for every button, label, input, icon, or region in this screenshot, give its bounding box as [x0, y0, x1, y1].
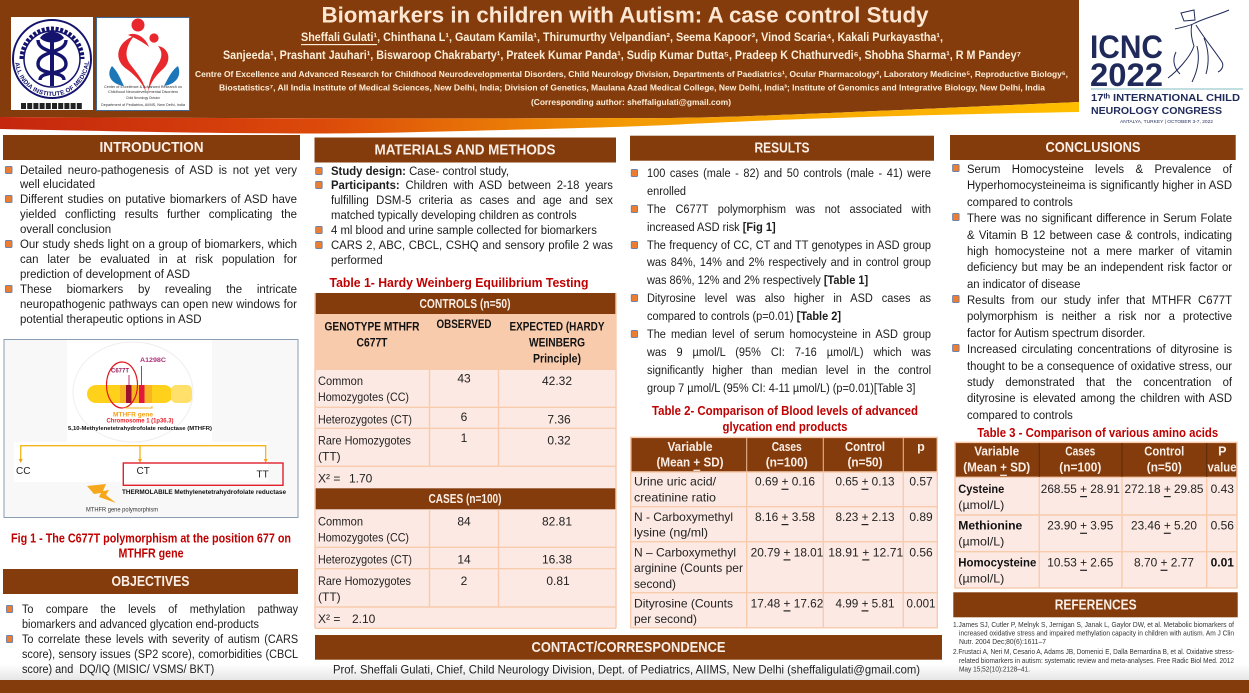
introduction text: These biomarkers by revealing the intricate [20, 282, 297, 296]
controls subtable: Homozygotes (CC) [318, 390, 409, 404]
controls subtable: WEINBERG [529, 336, 585, 350]
heading: introduction [3, 135, 300, 160]
table 3: amino acids: (µmol/L) [958, 498, 1004, 512]
logo: Centre of Excellence: Child Neurology Division [126, 96, 160, 100]
objectives text: To correlate these levels with severity of autism (CARS [22, 632, 298, 646]
poster title: Biomarkers in children with Autism: A case control Study [322, 2, 929, 28]
conclusions text: study demonstrated that the concentration of [967, 375, 1232, 389]
conclusions text: compared to controls [967, 408, 1073, 422]
heading: introduction: INTRODUCTION [100, 139, 204, 156]
conclusions text: compared to controls [967, 195, 1073, 209]
introduction text: neuropathogenic pathways can open new windows for [20, 297, 297, 311]
controls subtable: 0.32 [547, 433, 571, 447]
table 2: blood levels: 18.91 + 12.71 [828, 545, 904, 559]
controls subtable: Principle) [533, 352, 581, 366]
table 3: amino acids: (n=50) [1147, 461, 1182, 475]
controls subtable: Common [318, 374, 363, 388]
heading: results: RESULTS [754, 140, 810, 157]
results text: The frequency of CC, CT and TT genotypes in ASD group [647, 238, 931, 252]
results text: was 84%, 14% and 2% respectively and in control group [647, 255, 931, 269]
table 2: blood levels: N - Carboxymethyl [634, 510, 733, 524]
table 2: blood levels: (n=50) [848, 456, 882, 470]
materials and methods text: matched typically developing children as controls [331, 208, 577, 222]
table 3: amino acids: 23.90 + 3.95 [1047, 519, 1114, 533]
conclusions text: factor for Autism spectrum disorder. [967, 326, 1145, 340]
objectives text: score), sensory issues (SP2 score), comorbidities (CBCL [22, 646, 298, 660]
table 3: amino acids: Methionine [958, 519, 1023, 533]
table 3: amino acids: value [1208, 461, 1237, 475]
table 2: blood levels: Cases [772, 440, 802, 454]
results text: The C677T polymorphism was not associated with [647, 202, 931, 216]
cases subtable: Rare Homozygotes [318, 574, 411, 588]
table 3: amino acids: (n=100) [1059, 461, 1101, 475]
heading: references [953, 592, 1238, 617]
figure 1: MTHFR polymorphism diagram: 5,10-Methylenetetrahydrofolate reductase (MTHFR) [68, 426, 212, 432]
results text: The median level of serum homocysteine in ASD group [647, 327, 931, 341]
heading: contact [315, 635, 942, 660]
results text: significantly higher than median level in the control [647, 363, 931, 377]
controls subtable [318, 297, 604, 485]
figure 1: MTHFR polymorphism diagram: C677T [111, 368, 129, 374]
heading: materials and methods: MATERIALS AND METHODS [374, 142, 556, 158]
logo: Centre of Excellence: Childhood Neurodevelopmental Disorders [108, 90, 178, 94]
cases subtable: X² = [318, 612, 340, 626]
table 3: amino acids: (µmol/L) [958, 535, 1004, 549]
table 3: amino acids: Cases [1065, 445, 1095, 459]
cases subtable: Heterozygotes (CT) [318, 552, 412, 566]
table 2: blood levels: 8.16 + 3.58 [755, 510, 815, 524]
table 3: amino acids: 268.55 + 28.91 [1041, 482, 1120, 496]
results text: compared to controls (p=0.01) [Table 2] [647, 309, 841, 323]
materials and methods text [315, 164, 613, 267]
conclusions text: high homocysteine not a mere marker of vitamin [967, 244, 1232, 258]
logo: ICNC 2022: 2022 [1090, 57, 1163, 93]
cases subtable: (TT) [318, 590, 341, 604]
introduction text [4, 162, 297, 326]
logo: ICNC 2022: ICNC [1090, 29, 1163, 65]
controls subtable: Heterozygotes (CT) [318, 412, 412, 426]
table 3: amino acids: 0.01 [1211, 556, 1234, 570]
controls subtable: 1 [461, 431, 468, 445]
table 2: blood levels: Dityrosine (Counts [634, 596, 733, 610]
cases subtable: 16.38 [542, 552, 572, 566]
conclusions text: There was no significant difference in Serum Folate [967, 211, 1232, 225]
introduction text: Detailed neuro-pathogenesis of ASD is not yet very [20, 162, 297, 176]
table 2: blood levels: creatinine ratio [634, 491, 716, 505]
figure 1: MTHFR polymorphism diagram: CT [136, 466, 150, 477]
introduction text: Different studies on putative biomarkers of ASD have [20, 192, 297, 206]
table 2: blood levels: N – Carboxymethyl [634, 545, 736, 559]
authors: Sanjeeda¹, Prashant Jauhari¹, Biswaroop Chakrabarty¹, Prateek Kumar Panda¹, Sudip Kumar Dutta⁵, Pradeep K Chathurvedi⁶, Shobha Sharma¹, R M Pandey⁷ [223, 50, 1021, 62]
figure 1 caption: MTHFR gene [118, 546, 184, 560]
objectives text: biomarkers and advanced glycation end-products [22, 616, 259, 630]
conclusions text: Increased circulating concentrations of dityrosine is [967, 342, 1232, 356]
table 2: blood levels: (n=100) [766, 456, 808, 470]
table 3: amino acids [954, 442, 1238, 588]
table 3: amino acids: 8.70 + 2.77 [1134, 556, 1194, 570]
objectives text: score) and DQ/IQ (MISIC/ VSMS/ BKT) [22, 662, 214, 676]
objectives text: To compare the levels of methylation pathway [22, 602, 298, 616]
table 2: blood levels: arginine (Counts per [634, 561, 743, 575]
cases subtable: 0.81 [546, 574, 570, 588]
table 3: amino acids: 0.56 [1211, 519, 1234, 533]
table 2: blood levels: Variable [668, 440, 713, 454]
introduction text: Our study sheds light on a group of biomarkers, which [20, 237, 297, 251]
table 3: amino acids: Variable [974, 445, 1019, 459]
contact details: Prof. Sheffali Gulati, Chief, Child Neurology Division, Dept. of Pediatrics, AIIMS, New Delhi (sheffaligulati@gmail.com) [333, 662, 920, 676]
logo: ICNC 2022: ANTALYA, TURKEY | OCTOBER 3-7, 2022 [1120, 119, 1213, 124]
affiliations: Centre Of Excellence and Advanced Research for Childhood Neurodevelopmental Disorders, Child Neurology Division, Departments of Paediatrics¹, Ocular Pharmacology², Laboratory Medicine⁵, Reproductive Biology⁶, [195, 69, 1068, 79]
authors: Sheffali Gulati¹, Chinthana L¹, Gautam Kamila¹, Thirumurthy Velpandian², Seema Kapoor³, Vinod Scaria⁴, Kakali Purkayastha¹, [301, 32, 943, 44]
conclusions text: thought to be a consequence of oxidative stress, our [967, 358, 1232, 372]
controls subtable: C677T [356, 336, 388, 350]
table 2: blood levels: Control [845, 440, 885, 454]
table 3: amino acids: 0.43 [1211, 482, 1234, 496]
table 2: blood levels: 8.23 + 2.13 [836, 510, 895, 524]
table 2: blood levels: per second) [634, 612, 697, 626]
controls subtable: 6 [461, 410, 468, 424]
affiliations: Biostatistics⁷, All India Institute of Medical Sciences, New Delhi, India; Division of Genetics, Maulana Azad Medical College, New Delhi, India³; Institute of Genomics and Integrative Biology, New Delhi, India [219, 82, 1045, 92]
heading: conclusions: CONCLUSIONS [1046, 139, 1140, 156]
controls subtable: Rare Homozygotes [318, 433, 411, 447]
table 3: amino acids: Control [1144, 445, 1184, 459]
table 2 title: Table 2- Comparison of Blood levels of advanced [652, 403, 918, 418]
figure 1 caption [11, 530, 291, 560]
table 3: amino acids: 272.18 + 29.85 [1124, 482, 1204, 496]
cases subtable: 2 [461, 574, 468, 588]
table 3: amino acids: P [1218, 445, 1226, 459]
logo: Centre of Excellence [96, 18, 190, 110]
table 3: amino acids: 10.53 + 2.65 [1047, 556, 1114, 570]
logo: ICNC 2022 [1090, 10, 1243, 124]
introduction text: prediction of development of ASD [20, 267, 190, 281]
introduction text: potential therapeutic options in ASD [20, 312, 202, 326]
heading: objectives: OBJECTIVES [112, 573, 190, 590]
heading: materials and methods [314, 138, 616, 162]
table 2: blood levels: 0.65 + 0.13 [836, 475, 895, 489]
introduction text: overall conclusion [20, 222, 111, 236]
controls subtable: OBSERVED [436, 317, 492, 331]
results text: was 9 µmol/L (95% CI: 7-16 µmol/L) which was [647, 345, 931, 359]
results text: was 86%, 12% and 2% respectively [Table 1] [647, 273, 868, 287]
table 1: Hardy Weinberg [315, 293, 616, 628]
controls subtable: 7.36 [547, 412, 571, 426]
authors [223, 32, 1021, 62]
cases subtable: Common [318, 515, 363, 529]
results text: Dityrosine level was also higher in ASD cases as [647, 291, 931, 305]
cases subtable: 14 [457, 552, 471, 566]
conclusions text [952, 162, 1232, 422]
objectives text [6, 602, 298, 676]
conclusions text: & Vitamin B 12 between case & controls, indicating [967, 228, 1232, 242]
materials and methods text: Study design: Case- control study, [331, 164, 509, 178]
heading: conclusions [950, 135, 1236, 160]
footer bar [0, 664, 1249, 693]
cases subtable: 82.81 [542, 515, 572, 529]
logo: Centre of Excellence: Department of Pediatrics, AIIMS, New Delhi, India [101, 103, 185, 107]
cases subtable [318, 492, 572, 626]
references list: Nutr. 2004 Dec;80(6):1611–7 [959, 637, 1046, 646]
table 2: blood levels: Urine uric acid/ [634, 475, 717, 489]
affiliations [195, 69, 1068, 107]
table 3: amino acids: Homocysteine [958, 556, 1037, 570]
results text: 100 cases (male - 82) and 50 controls (male - 41) were [647, 166, 931, 180]
figure 1: MTHFR polymorphism diagram: THERMOLABILE Methylenetetrahydrofolate reductase [122, 489, 286, 496]
materials and methods text: CARS 2, ABC, CBCL, CSHQ and sensory profile 2 was [331, 238, 613, 252]
table 1 title: Table 1- Hardy Weinberg Equilibrium Testing [330, 275, 589, 290]
logo: ICNC 2022: NEUROLOGY CONGRESS [1091, 106, 1222, 117]
logo: Centre of Excellence: Center of Excellence & Advanced Research on [104, 85, 182, 89]
table 3: amino acids: Cysteine [958, 482, 1005, 496]
heading: contact: CONTACT/CORRESPONDENCE [532, 639, 726, 656]
table 2: blood levels: (Mean + SD) [656, 456, 724, 470]
figure 1: MTHFR polymorphism diagram: MTHFR gene [113, 412, 153, 418]
logo: ICNC 2022: 17ᵗʰ INTERNATIONAL CHILD [1091, 93, 1240, 104]
controls subtable: X² = [318, 471, 340, 485]
figure 1 caption: Fig 1 - The C677T polymorphism at the position 677 on [11, 530, 291, 546]
controls subtable: (TT) [318, 449, 341, 463]
table 2: blood levels: p [917, 440, 925, 454]
conclusions text: Hyperhomocysteineima is significantly higher in ASD [967, 178, 1232, 192]
controls subtable: 42.32 [542, 374, 572, 388]
table 2: blood levels: 0.57 [909, 475, 933, 489]
cases subtable: Homozygotes (CC) [318, 531, 409, 545]
introduction text: yielded conflicting results further complicating the [20, 207, 297, 221]
cases subtable: CASES (n=100) [428, 492, 502, 506]
conclusions text: Results from our study infer that MTHFR C677T [967, 293, 1232, 307]
conclusions text: Serum Homocysteine levels & Prevalence of [967, 162, 1232, 176]
heading: results [630, 136, 934, 161]
table 3: amino acids: 23.46 + 5.20 [1131, 519, 1197, 533]
table 2: blood levels: 17.48 + 17.62 [751, 596, 824, 610]
table 2 title [652, 403, 918, 434]
controls subtable: GENOTYPE MTHFR [324, 320, 420, 334]
references list [953, 620, 1235, 674]
controls subtable: 43 [457, 372, 471, 386]
results text: enrolled [647, 184, 686, 198]
table 3: amino acids: (µmol/L) [958, 572, 1004, 586]
table 2 title: glycation end products [722, 419, 848, 434]
heading: references: REFERENCES [1055, 596, 1137, 613]
figure 1: MTHFR polymorphism diagram [4, 340, 298, 518]
references list: 1.James SJ, Cutler P, Melnyk S, Jernigan S, Janak L, Gaylor DW, et al. Metabolic biomarkers of [953, 620, 1234, 629]
table 2: blood levels: lysine (ng/ml) [634, 526, 708, 540]
conclusions text: deficiency but may be an independent risk factor or [967, 260, 1232, 274]
figure 1: MTHFR polymorphism diagram: A1298C [140, 357, 166, 364]
controls subtable: EXPECTED (HARDY [510, 320, 604, 334]
figure 1: MTHFR polymorphism diagram: Chromosome 1 (1p36.3) [106, 419, 174, 425]
heading: objectives [3, 569, 298, 594]
table 2: blood levels [630, 437, 938, 628]
table 2: blood levels: 4.99 + 5.81 [836, 596, 895, 610]
figure 1: MTHFR polymorphism diagram: TT [256, 470, 269, 480]
conclusions text: an indicator of disease [967, 277, 1080, 291]
table 2: blood levels: second) [634, 577, 676, 591]
table 3: amino acids: (Mean + SD) [963, 461, 1030, 475]
materials and methods text: 4 ml blood and urine sample collected for biomarkers [331, 223, 597, 237]
results text: group 7 µmol/L (95% CI: 4-11 µmol/L) (p=0.01)[Table 3] [647, 381, 915, 395]
conclusions text: polymorphism is neither a risk nor a protective [967, 309, 1232, 323]
table 2: blood levels: 20.79 + 18.01 [751, 545, 824, 559]
introduction text: can later be evaluated in at risk population for [20, 252, 297, 266]
table 3 title: Table 3 - Comparison of various amino acids [977, 425, 1218, 440]
conclusions text: dityrosine is elevated among the children with ASD [967, 391, 1232, 405]
materials and methods text: Participants: Children with ASD between 2-18 years [331, 178, 613, 192]
logo: AIIMS [11, 17, 93, 110]
header banner [0, 0, 1079, 133]
introduction text: well elucidated [20, 177, 95, 191]
table 2: blood levels: 0.89 [909, 510, 933, 524]
results text: increased ASD risk [Fig 1] [647, 220, 776, 234]
table 2: blood levels: 0.56 [909, 545, 933, 559]
figure 1: MTHFR polymorphism diagram: MTHFR gene polymorphism [86, 506, 158, 514]
table 2: blood levels: 0.69 + 0.16 [755, 475, 815, 489]
controls subtable: 1.70 [349, 471, 373, 485]
figure 1: MTHFR polymorphism diagram: CC [16, 466, 30, 477]
materials and methods text: fulfilling DSM-5 criteria as cases and age and sex [331, 193, 613, 207]
materials and methods text: performed [331, 253, 383, 267]
results text [630, 166, 931, 395]
cases subtable: 2.10 [352, 612, 376, 626]
table 2: blood levels: 0.001 [906, 596, 936, 610]
cases subtable: 84 [457, 515, 471, 529]
affiliations: (Corresponding author: sheffaligulati@gmail.com) [531, 97, 731, 107]
references list: May 15;52(10):2128–41. [959, 664, 1030, 674]
controls subtable: CONTROLS (n=50) [420, 297, 510, 311]
